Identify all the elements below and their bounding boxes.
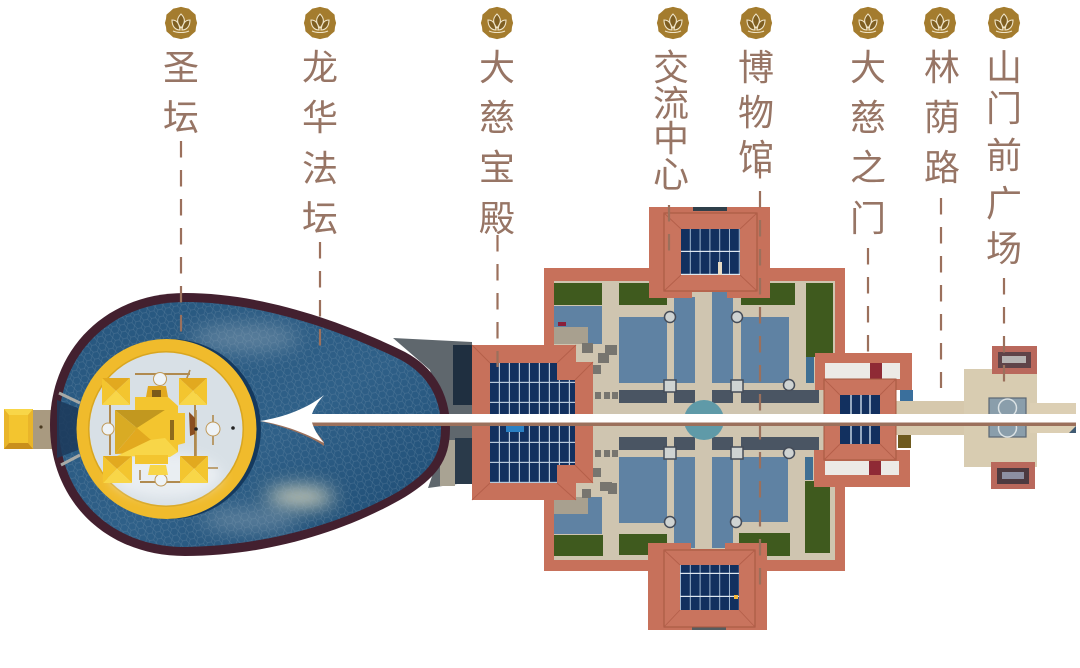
forest path <box>896 401 966 435</box>
corner roof bottom left <box>103 456 132 483</box>
basin: 龙华法坛 blue roof <box>50 293 450 556</box>
label: 大慈宝殿: 大 <box>479 47 515 88</box>
label: 大慈之门: 门 <box>850 198 886 239</box>
central round pond <box>684 400 724 440</box>
label: 大慈宝殿 <box>479 8 515 239</box>
label: 龙华法坛: 龙 <box>302 47 338 88</box>
icon: lotus <box>852 8 884 38</box>
label: 山门前广场: 前 <box>986 135 1022 176</box>
icon: lotus <box>658 8 688 38</box>
label: 交流中心: 流 <box>653 83 689 124</box>
corner roof top right <box>179 378 207 405</box>
label: 大慈之门 <box>850 8 886 239</box>
label: 大慈之门: 慈 <box>850 97 886 138</box>
label: 大慈宝殿: 宝 <box>479 147 515 188</box>
label: 山门前广场: 门 <box>986 88 1022 129</box>
label: 林荫路: 路 <box>924 147 960 188</box>
top pavilion: exchange centre and museum <box>649 207 770 298</box>
label: 山门前广场: 山 <box>986 47 1022 88</box>
label: 交流中心: 中 <box>653 118 689 159</box>
label: 龙华法坛: 坛 <box>302 198 338 239</box>
central plaza roof frame <box>544 268 845 571</box>
connector between basin and main hall <box>393 338 472 488</box>
plaza paving and gardens <box>554 283 833 556</box>
stepping stones <box>582 343 618 498</box>
lower gatehouse <box>991 462 1035 489</box>
icon: lotus <box>924 8 956 38</box>
white domes <box>102 372 220 486</box>
upper gatehouse <box>992 346 1037 374</box>
label: 山门前广场 <box>986 8 1022 269</box>
label: 圣坛 <box>163 8 199 138</box>
label: 博物馆: 物 <box>738 92 774 133</box>
label: 博物馆: 馆 <box>738 137 774 178</box>
label: 龙华法坛: 华 <box>302 97 338 138</box>
dashed leader lines <box>181 141 1004 585</box>
corner roof top left <box>102 378 130 405</box>
label: 交流中心 <box>653 8 689 195</box>
icon: lotus <box>304 8 336 38</box>
label: 龙华法坛 <box>302 8 338 239</box>
label: 交流中心: 交 <box>653 47 689 88</box>
corner roof bottom right <box>180 456 208 483</box>
label: 大慈宝殿: 慈 <box>479 97 515 138</box>
white direction arrow <box>260 395 1076 446</box>
sacred altar: gold temple roofs <box>102 370 235 486</box>
icon: lotus <box>740 8 772 38</box>
label: 大慈之门: 大 <box>850 47 886 88</box>
label: 博物馆: 博 <box>738 47 774 88</box>
central temple <box>115 386 235 475</box>
label: 圣坛: 坛 <box>163 97 199 138</box>
main hall: 大慈宝殿 <box>472 345 593 500</box>
gate: 大慈之门 <box>814 353 913 487</box>
label: 林荫路: 林 <box>924 47 960 88</box>
icon: lotus <box>482 8 512 38</box>
square mosaic <box>989 398 1026 437</box>
label: 博物馆 <box>738 8 774 178</box>
label: 山门前广场: 广 <box>986 183 1022 224</box>
mountain gate front square <box>964 346 1076 489</box>
label: 龙华法坛: 法 <box>302 148 338 189</box>
label: 山门前广场: 场 <box>986 228 1022 269</box>
label: 林荫路: 荫 <box>924 97 960 138</box>
label: 林荫路 <box>924 8 960 188</box>
paving nodes <box>664 312 794 528</box>
icon: lotus <box>988 8 1020 38</box>
label: 圣坛: 圣 <box>163 47 199 88</box>
label: 交流中心: 心 <box>653 154 689 195</box>
icon: lotus <box>166 8 196 38</box>
label: 大慈宝殿: 殿 <box>479 198 515 239</box>
label: 大慈之门: 之 <box>850 147 886 188</box>
sacred altar: gold ring <box>76 339 261 519</box>
bottom pavilion <box>648 543 767 630</box>
left small gold gate <box>4 409 53 449</box>
